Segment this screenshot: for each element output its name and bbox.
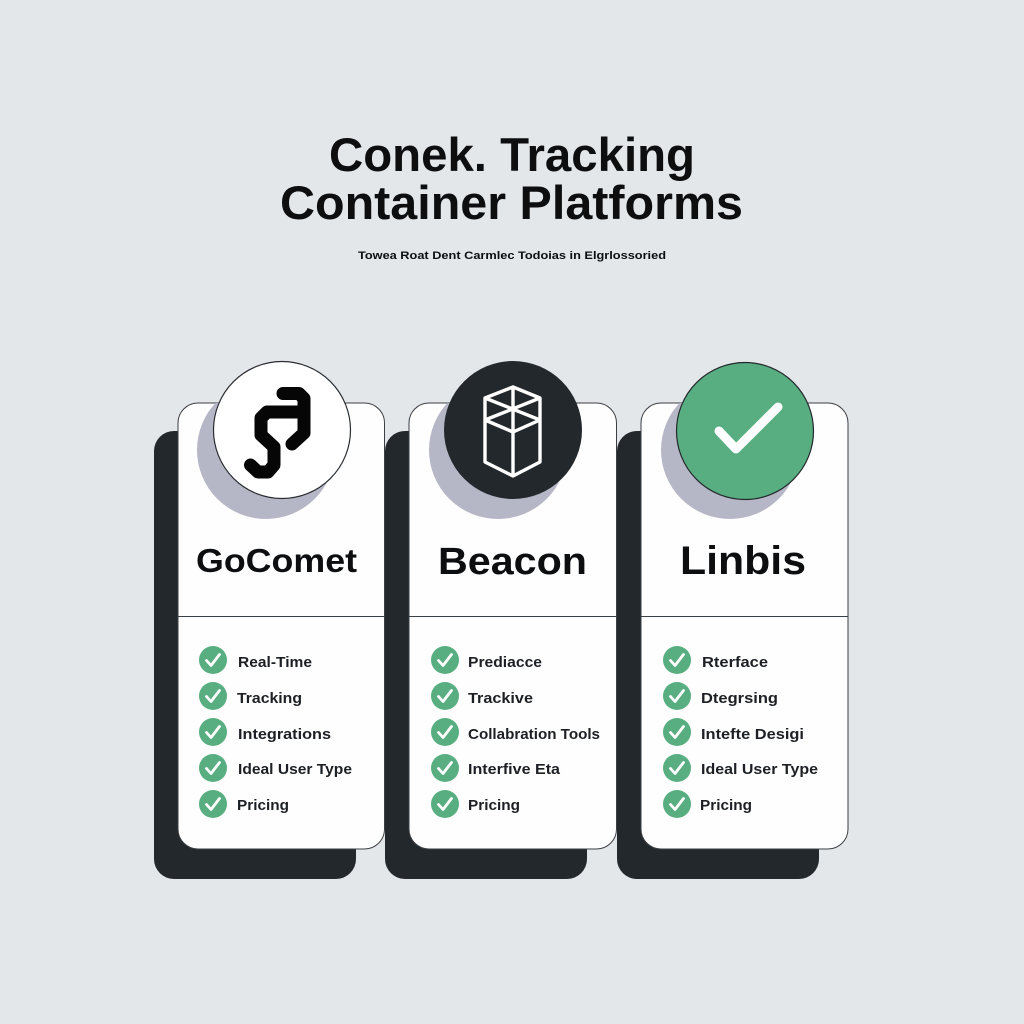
panel: Linbis (617, 362, 848, 879)
feature list (199, 646, 352, 818)
feature list: Real-Time (238, 654, 312, 671)
title (280, 128, 743, 229)
icon: green check (676, 362, 814, 500)
title: Container Platforms (280, 176, 743, 229)
panel: GoComet (154, 362, 384, 879)
feature list: Dtegrsing (701, 690, 778, 707)
offset dark backing (385, 431, 587, 879)
title: Conek. Tracking (329, 128, 695, 181)
icon: container box (444, 361, 582, 499)
card body (641, 403, 848, 849)
name: GoComet (196, 542, 357, 579)
feature list: Pricing (237, 797, 289, 814)
offset dark backing (154, 431, 356, 879)
panel: Beacon (385, 361, 616, 879)
feature list: Rterface (702, 654, 768, 671)
icon: GoComet logo (214, 362, 350, 498)
feature list: Interfive Eta (468, 761, 561, 778)
feature list: Ideal User Type (701, 761, 818, 778)
icon shadow (661, 403, 791, 519)
feature list (431, 646, 600, 818)
feature list: Prediacce (468, 654, 542, 671)
feature list: Integrations (238, 726, 331, 743)
feature list: Pricing (700, 797, 752, 814)
feature list: Trackive (468, 690, 533, 707)
feature list: Intefte Desigi (701, 726, 804, 743)
card body (178, 403, 384, 849)
feature list: Ideal User Type (238, 761, 352, 778)
subtitle: Towea Roat Dent Carmlec Todoias in Elgrlossoried (358, 250, 666, 262)
offset dark backing (617, 431, 819, 879)
feature list: Pricing (468, 797, 520, 814)
feature list (663, 646, 818, 818)
feature list: Tracking (237, 690, 302, 707)
card body (409, 403, 616, 849)
name: Linbis (680, 539, 806, 583)
feature list: Collabration Tools (468, 726, 600, 743)
icon shadow (429, 403, 560, 519)
icon shadow (197, 403, 327, 519)
name: Beacon (438, 541, 587, 583)
